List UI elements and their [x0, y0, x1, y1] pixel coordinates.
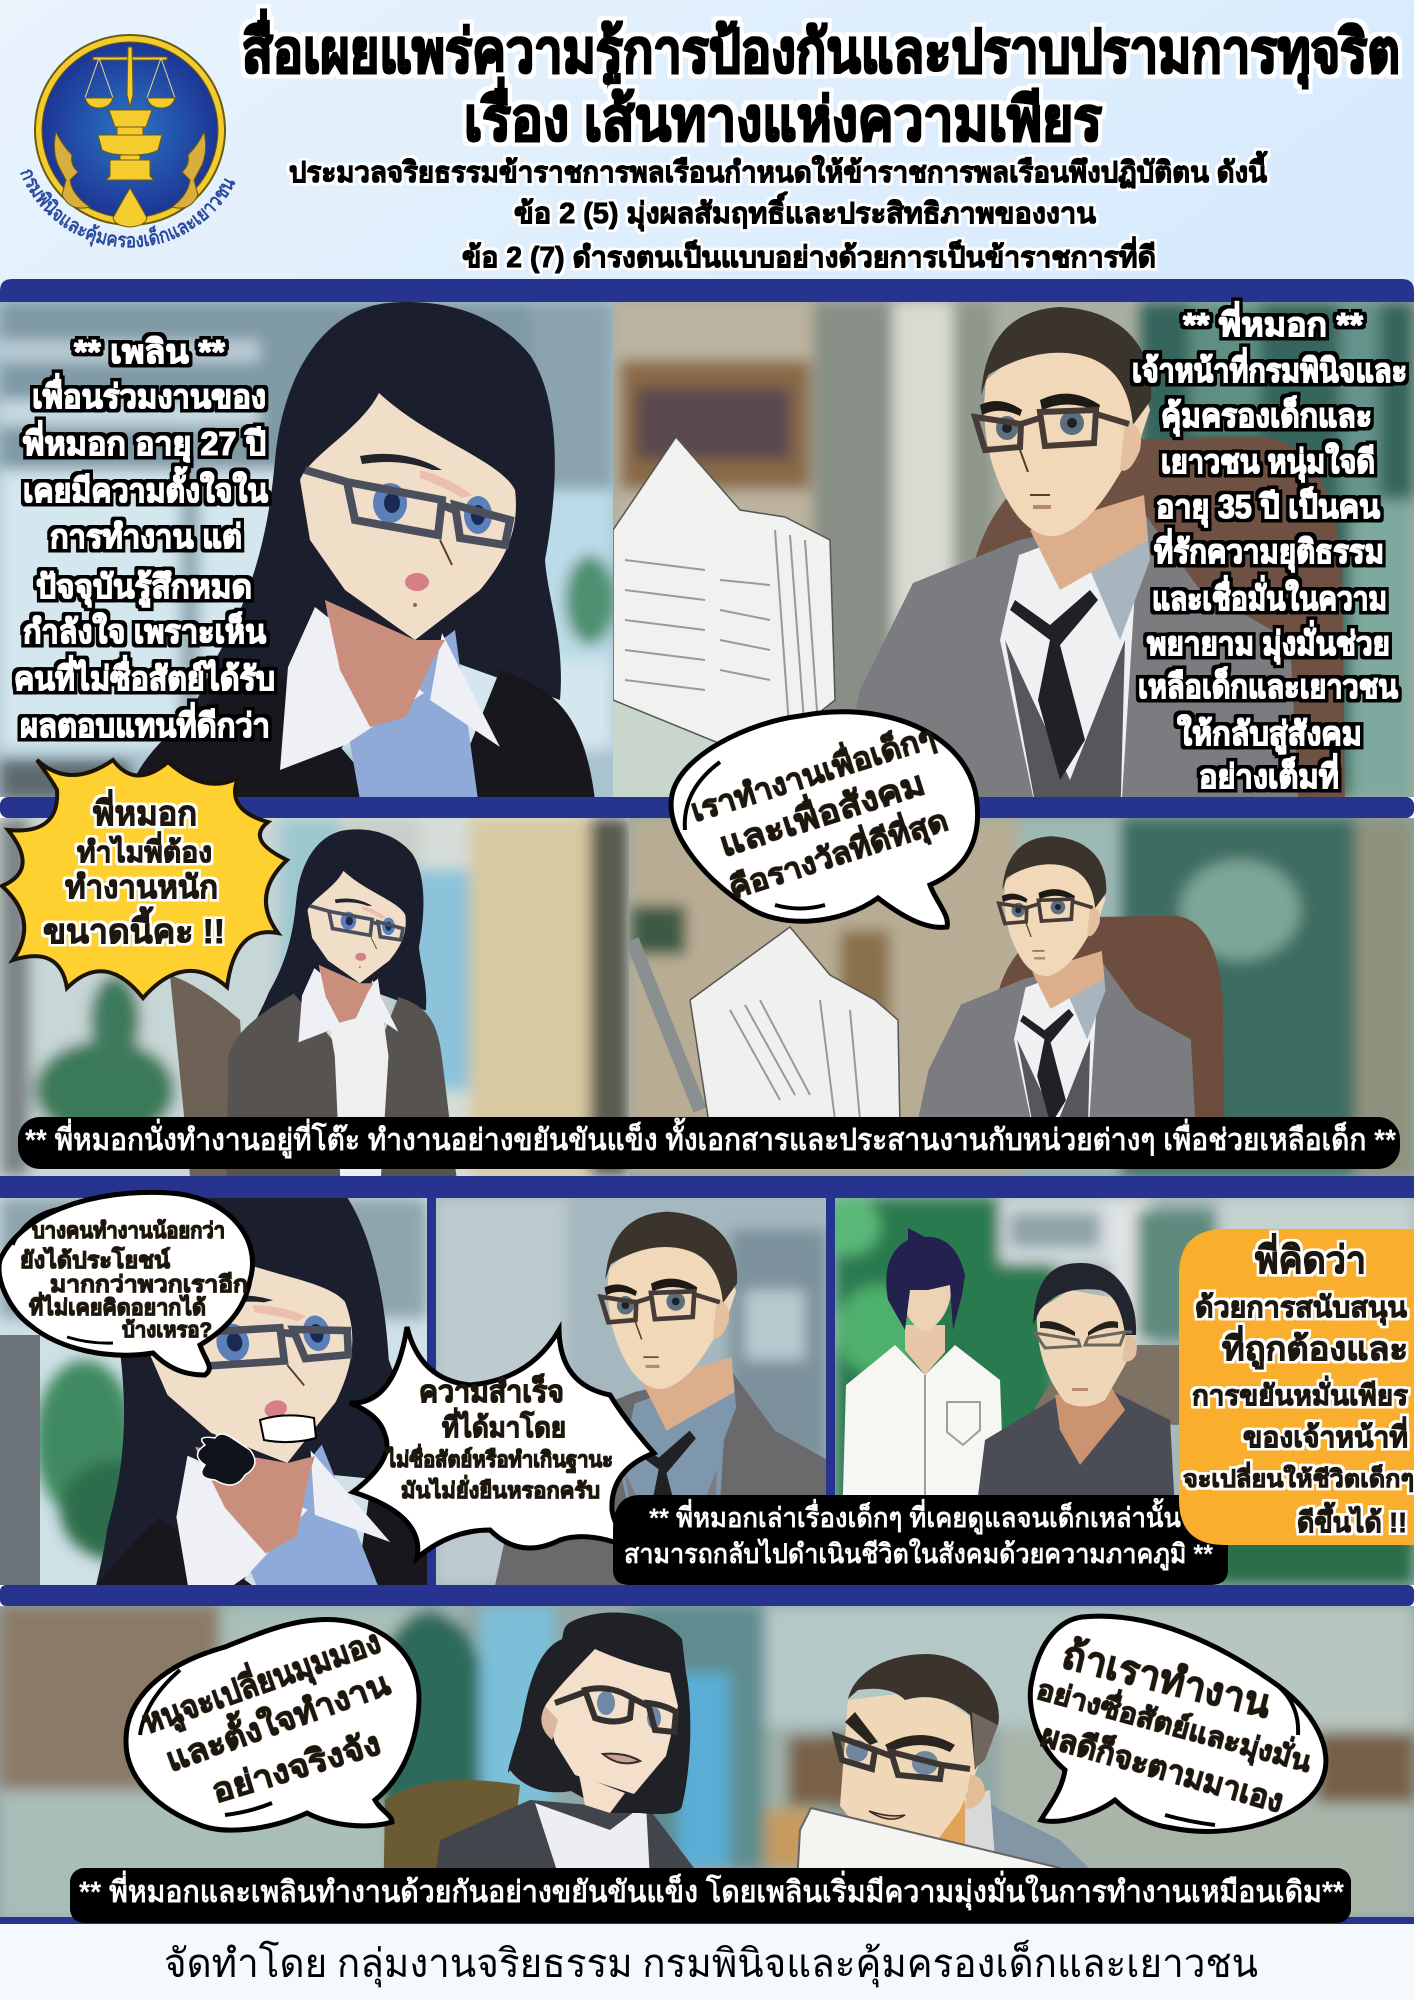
- paper pile: [690, 927, 900, 1130]
- panel text: Pi Mok profile: อายุ 35 ปี เป็นคน: [1156, 486, 1380, 528]
- panel: Pi Mok explains: [436, 1198, 826, 1585]
- callout: Pi Mok thinks: ของเจ้าหน้าที่: [1243, 1416, 1408, 1454]
- yellow burst: Ploen asks: [2, 760, 287, 998]
- speech burst: Pi Mok reply: ที่ได้มาโดย: [442, 1407, 566, 1443]
- title: เรื่อง เส้นทางแห่งความเพียร: [464, 77, 1102, 153]
- subtitle: ethics clauses: ประมวลจริยธรรมข้าราชการพลเรือนกำหนดให้ข้าราชการพลเรือนพึงปฏิบัติตน ดังนี้: [289, 150, 1268, 189]
- caption: working together: [70, 1868, 1351, 1923]
- panel: Ploen frustrated: [0, 1198, 427, 1585]
- paper stack: [613, 437, 835, 797]
- panel text: Pi Mok profile: ** พี่หมอก **: [1183, 301, 1363, 343]
- teeth: [260, 1415, 316, 1442]
- caption: children's stories: สามารถกลับไปดำเนินชีวิตในสังคมด้วยความภาคภูมิ **: [624, 1538, 1213, 1571]
- panel text: Ploen profile: เพื่อนร่วมงานของ: [32, 373, 266, 415]
- speech bubble: Ploen complaint: [0, 1192, 252, 1375]
- panel text: Ploen profile: เคยมีความตั้งใจใน: [23, 466, 268, 509]
- chair behind officer: [1030, 1345, 1180, 1425]
- speech bubble: Ploen resolves: และตั้งใจทำงาน: [159, 1659, 395, 1779]
- speech burst: Pi Mok reply: มันไม่ยั่งยืนหรอกครับ: [401, 1474, 600, 1503]
- panel text: Pi Mok profile: อย่างเต็มที่: [1199, 753, 1339, 795]
- callout: Pi Mok thinks: ที่ถูกต้องและ: [1222, 1325, 1408, 1370]
- panel: Ploen at desk: [0, 818, 629, 1176]
- callout: Pi Mok thinks: ด้วยการสนับสนุน: [1195, 1292, 1407, 1325]
- callout: Pi Mok thinks: ดีขึ้นได้ !!: [1297, 1501, 1407, 1538]
- speech bubble: Ploen complaint: บางคนทำงานน้อยกว่า: [32, 1218, 225, 1243]
- speech bubble: Ploen complaint: บ้างเหรอ?: [122, 1318, 212, 1342]
- officer in dark shirt: [978, 1263, 1174, 1495]
- man with papers: [832, 1654, 1089, 1868]
- speech bubble: Ploen resolves: [126, 1618, 419, 1830]
- youth in white shirt: [842, 1228, 1002, 1495]
- panel text: Pi Mok profile: ให้กลับสู่สังคม: [1177, 714, 1362, 755]
- speech bubble: top right dialogue: คือรางวัลที่ดีที่สุด: [723, 798, 953, 908]
- speech bubble: Ploen complaint: ยังได้ประโยชน์: [20, 1246, 170, 1273]
- header background: [0, 0, 1414, 302]
- icon: naga left: [54, 132, 90, 208]
- callout: Pi Mok thinks: [1179, 1229, 1414, 1545]
- callout: Pi Mok thinks: พี่คิดว่า: [1255, 1233, 1366, 1282]
- speech bubble: Pi Mok encourages: [1030, 1616, 1326, 1831]
- yellow burst: Ploen asks: ขนาดนี้คะ !!: [43, 906, 225, 951]
- panel text: Pi Mok profile: พยายาม มุ่งมั่นช่วย: [1147, 620, 1390, 665]
- speech burst: Pi Mok reply: ความสำเร็จ: [419, 1373, 564, 1409]
- speech bubble: Pi Mok encourages: อย่างซื่อสัตย์และมุ่งมั่น: [1033, 1668, 1316, 1780]
- footer credit: จัดทำโดย กลุ่มงานจริยธรรม กรมพินิจและคุ้มครองเด็กและเยาวชน: [164, 1939, 1258, 1988]
- caption: Pi Mok working: [18, 1117, 1400, 1169]
- bar: navy band 4: [0, 1585, 1414, 1606]
- panel: Ploen introduction: [0, 302, 613, 797]
- panel: working together: [0, 1606, 1414, 1930]
- speech bubble: Ploen resolves: หนูจะเปลี่ยนมุมมอง: [135, 1618, 386, 1743]
- panel: child and officer: [820, 1195, 1414, 1600]
- panel text: Pi Mok profile: คุ้มครองเด็กและ: [1161, 395, 1372, 437]
- icon: scales and lotus pedestal: [85, 47, 175, 180]
- speech bubble: top right dialogue: [671, 712, 978, 927]
- document held up: [796, 1806, 1061, 1868]
- panel text: Pi Mok profile: [1132, 301, 1407, 795]
- panel text: Pi Mok profile: เยาวชน หนุ่มใจดี: [1161, 442, 1375, 483]
- subtitle: ethics clauses: [289, 150, 1268, 274]
- subtitle: ethics clauses: ข้อ 2 (5) มุ่งผลสัมฤทธิ์และประสิทธิภาพของงาน: [514, 191, 1096, 231]
- panel: Pi Mok at desk: [629, 818, 1414, 1176]
- callout: Pi Mok thinks: จะเปลี่ยนให้ชีวิตเด็กๆ: [1183, 1461, 1414, 1493]
- caption: children's stories: [613, 1495, 1228, 1585]
- caption: working together: ** พี่หมอกและเพลินทำงานด้วยกันอย่างขยันขันแข็ง โดยเพลินเริ่มมีความมุ่งมั่นในการทำงานเหมือนเดิม**: [79, 1870, 1344, 1911]
- leather chair: [384, 1780, 520, 1868]
- panel text: Pi Mok profile: ที่รักความยุติธรรม: [1154, 528, 1384, 573]
- speech burst: Pi Mok reply: ไม่ซื่อสัตย์หรือทำเกินฐานะ: [384, 1443, 613, 1474]
- yellow burst: Ploen asks: ทำงานหนัก: [65, 869, 218, 905]
- speech burst: Pi Mok reply: [350, 1327, 654, 1558]
- bar: navy band 3: [0, 1176, 1414, 1198]
- caption: children's stories: ** พี่หมอกเล่าเรื่องเด็กๆ ที่เคยดูแลจนเด็กเหล่านั้น: [649, 1497, 1182, 1535]
- speech bubble: top right dialogue: เราทำงานเพื่อเด็กๆ: [685, 715, 939, 829]
- speech bubble: Pi Mok encourages: ถ้าเราทำงาน: [1058, 1633, 1275, 1727]
- bar: navy band 2: [0, 797, 1414, 818]
- monitor edge: [632, 940, 700, 1110]
- panel text: Ploen profile: พี่หมอก อายุ 27 ปี: [23, 420, 266, 465]
- panel text: Ploen profile: คนที่ไม่ซื่อสัตย์ได้รับ: [14, 655, 275, 697]
- yellow burst: Ploen asks: พี่หมอก: [93, 789, 197, 833]
- panel text: Ploen profile: ** เพลิน **: [74, 333, 225, 370]
- logo: juvenile department seal: [20, 34, 236, 248]
- panel text: Ploen profile: การทำงาน แต่: [50, 518, 242, 555]
- woman smiling: [436, 1612, 694, 1868]
- panel text: Ploen profile: ปัจจุบันรู้สึกหมด: [36, 568, 252, 608]
- subtitle: ethics clauses: ข้อ 2 (7) ดำรงตนเป็นแบบอย่างด้วยการเป็นข้าราชการที่ดี: [462, 236, 1156, 274]
- speech bubble: top right dialogue: และเพื่อสังคม: [713, 759, 930, 865]
- panel text: Ploen profile: ผลตอบแทนที่ดีกว่า: [20, 702, 270, 744]
- bar: navy band 1: [0, 279, 1414, 302]
- icon: angry puff: [198, 1434, 255, 1485]
- logo text: กรมพินิจและคุ้มครองเด็กและเยาวชน: [20, 170, 236, 248]
- icon: lotus flame: [113, 188, 147, 227]
- title: [242, 9, 1400, 153]
- speech bubble: Ploen complaint: ที่ไม่เคยคิดอยากได้: [29, 1291, 206, 1320]
- icon: naga right: [172, 132, 206, 208]
- speech bubble: Ploen complaint: มากกว่าพวกเราอีก: [50, 1271, 248, 1297]
- callout: Pi Mok thinks: การขยันหมั่นเพียร: [1192, 1375, 1408, 1411]
- panel text: Ploen profile: กำลังใจ เพราะเห็น: [23, 611, 266, 650]
- panel text: Ploen profile: [14, 333, 275, 744]
- speech bubble: Ploen resolves: อย่างจริงจัง: [207, 1724, 385, 1810]
- yellow burst: Ploen asks: ทำไมพี่ต้อง: [77, 831, 212, 869]
- footer background: [0, 1923, 1414, 2000]
- panel: Pi Mok introduction: [613, 300, 1414, 830]
- speech bubble: Pi Mok encourages: ผลดีก็จะตามมาเอง: [1037, 1715, 1288, 1819]
- office chair: [170, 976, 241, 1176]
